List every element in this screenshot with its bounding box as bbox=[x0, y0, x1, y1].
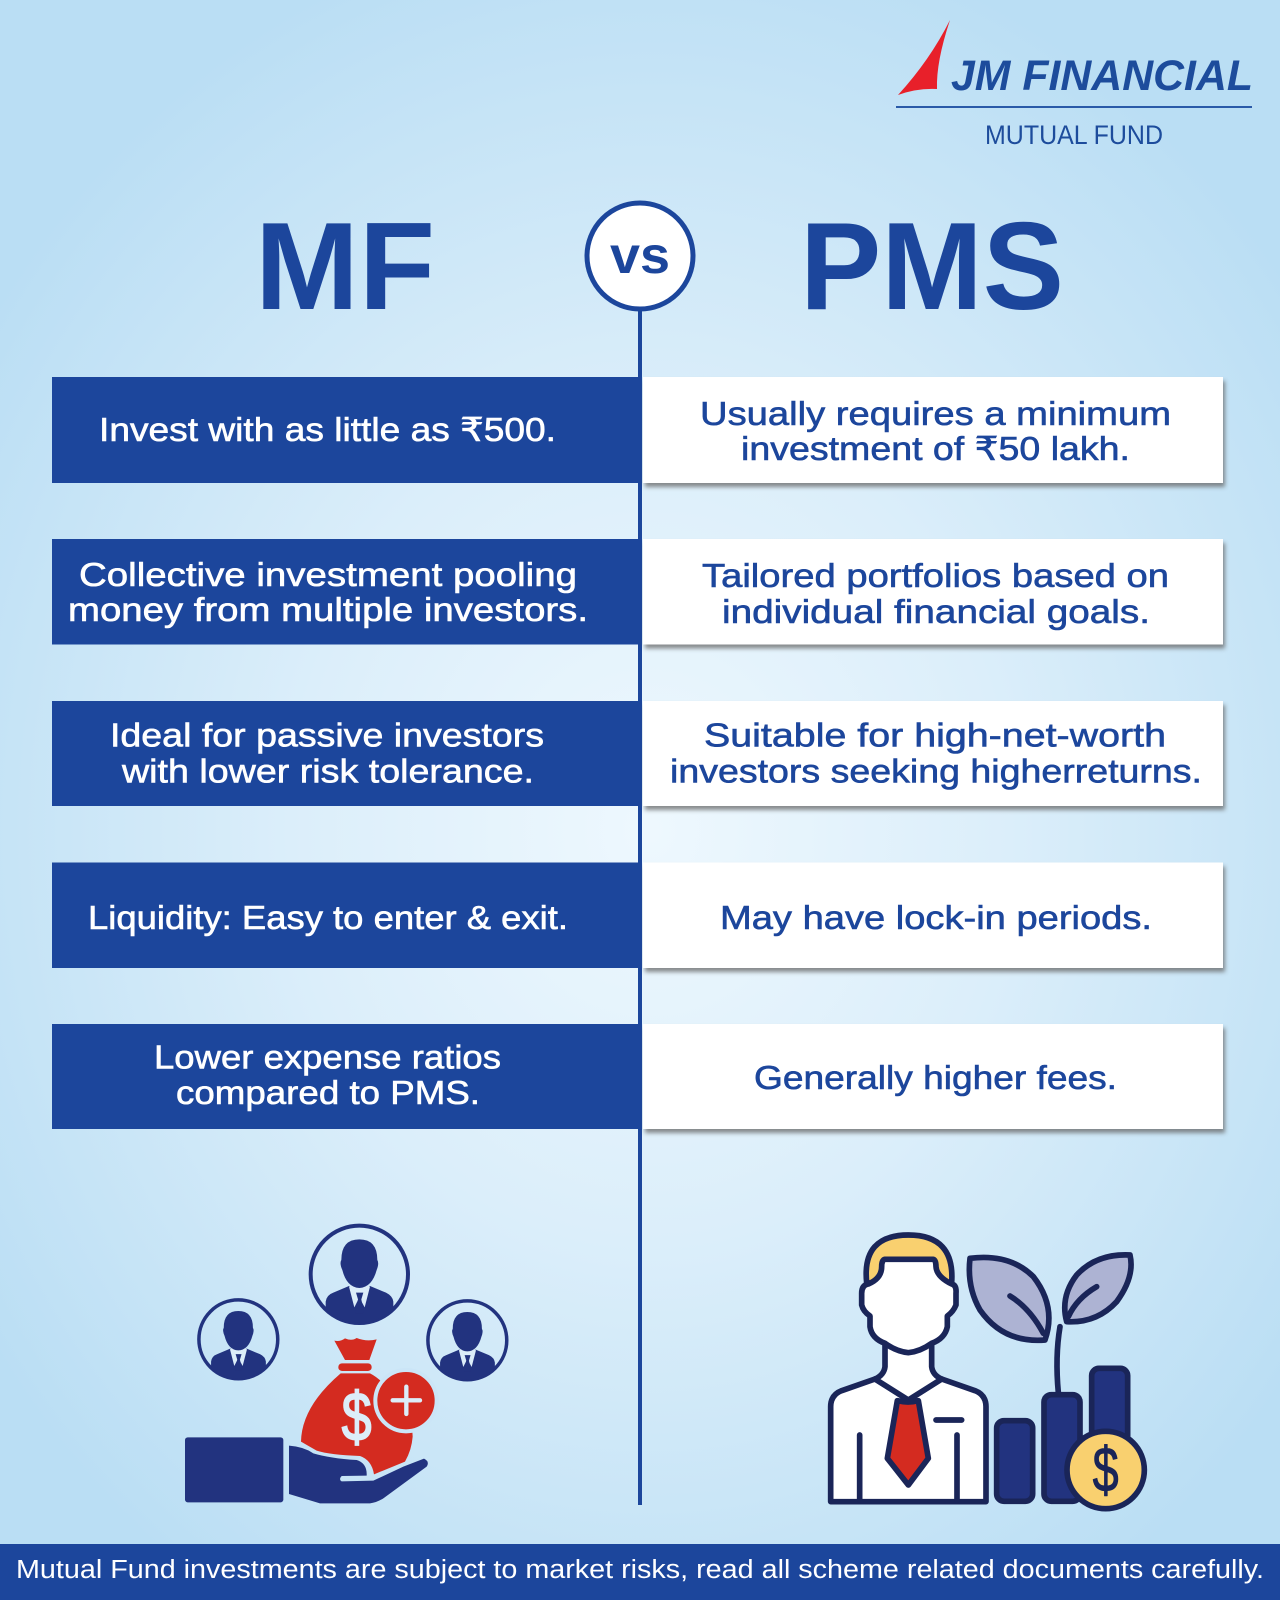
icon: PMS advisor with growth chart bbox=[831, 1235, 1144, 1509]
icon: plant leaves bbox=[969, 1255, 1131, 1393]
logo subtitle: MUTUAL FUND bbox=[985, 120, 1163, 150]
row 1 PMS: Usually requires a minimum bbox=[700, 395, 1171, 432]
row 3 PMS: investors seeking higherreturns. bbox=[670, 752, 1202, 790]
row 3 MF: Ideal for passive investors bbox=[110, 716, 544, 754]
row 3 MF: with lower risk tolerance. bbox=[121, 752, 534, 790]
icon: red sail bbox=[898, 20, 950, 95]
row 2 MF: Collective investment pooling bbox=[79, 556, 577, 593]
icon: advisor head bbox=[862, 1235, 956, 1353]
row 2 PMS bbox=[643, 539, 1225, 648]
row 1 MF: Invest with as little as ₹500. bbox=[99, 411, 556, 448]
row 2 PMS: Tailored portfolios based on bbox=[702, 557, 1169, 594]
icon: investors pooling money bbox=[185, 1226, 507, 1503]
icon: money bag: $ bbox=[342, 1380, 372, 1456]
row 4 MF: Liquidity: Easy to enter & exit. bbox=[88, 899, 568, 936]
icon: bar chart bbox=[997, 1368, 1128, 1501]
icon: red tie bbox=[887, 1401, 928, 1485]
row 5 PMS: Generally higher fees. bbox=[754, 1059, 1117, 1096]
heading: MF: MF bbox=[255, 198, 435, 336]
row 3 PMS: Suitable for high-net-worth bbox=[704, 716, 1166, 754]
row 3 PMS bbox=[643, 701, 1225, 810]
row 1 MF bbox=[52, 377, 638, 483]
row 2 MF: money from multiple investors. bbox=[68, 591, 588, 628]
icon: money bag bbox=[301, 1338, 437, 1474]
row 3 MF bbox=[52, 701, 638, 806]
row 4 PMS: May have lock-in periods. bbox=[720, 899, 1152, 936]
icon: giving hand bbox=[185, 1437, 428, 1503]
row 5 MF: compared to PMS. bbox=[176, 1074, 480, 1111]
row 2 MF bbox=[52, 539, 638, 644]
icon: investor right bbox=[428, 1301, 507, 1381]
row 5 MF bbox=[52, 1024, 638, 1129]
row 5 PMS bbox=[643, 1024, 1225, 1133]
row 4 MF bbox=[52, 862, 638, 968]
heading: PMS: PMS bbox=[800, 198, 1064, 336]
icon: investor left bbox=[199, 1300, 278, 1380]
icon: investor top bbox=[311, 1226, 408, 1325]
icon: dollar coin: $ bbox=[1093, 1436, 1119, 1506]
logo: JM Financial Mutual Fund bbox=[896, 20, 1253, 150]
row 5 MF: Lower expense ratios bbox=[154, 1038, 501, 1076]
row 1 PMS: investment of ₹50 lakh. bbox=[741, 430, 1130, 467]
row 2 PMS: individual financial goals. bbox=[722, 593, 1150, 630]
logo wordmark: JM FINANCIAL bbox=[951, 52, 1253, 100]
footer disclaimer bbox=[0, 1544, 1280, 1600]
vs badge bbox=[587, 203, 693, 309]
icon: advisor body bbox=[831, 1343, 986, 1502]
row 4 PMS bbox=[643, 862, 1225, 972]
icon: dollar coin bbox=[1067, 1431, 1144, 1509]
row 1 PMS bbox=[643, 377, 1225, 487]
vs badge: vs bbox=[610, 227, 670, 285]
center divider line bbox=[638, 300, 642, 1505]
footer disclaimer: Mutual Fund investments are subject to market risks, read all scheme related documents carefully. bbox=[16, 1556, 1264, 1584]
